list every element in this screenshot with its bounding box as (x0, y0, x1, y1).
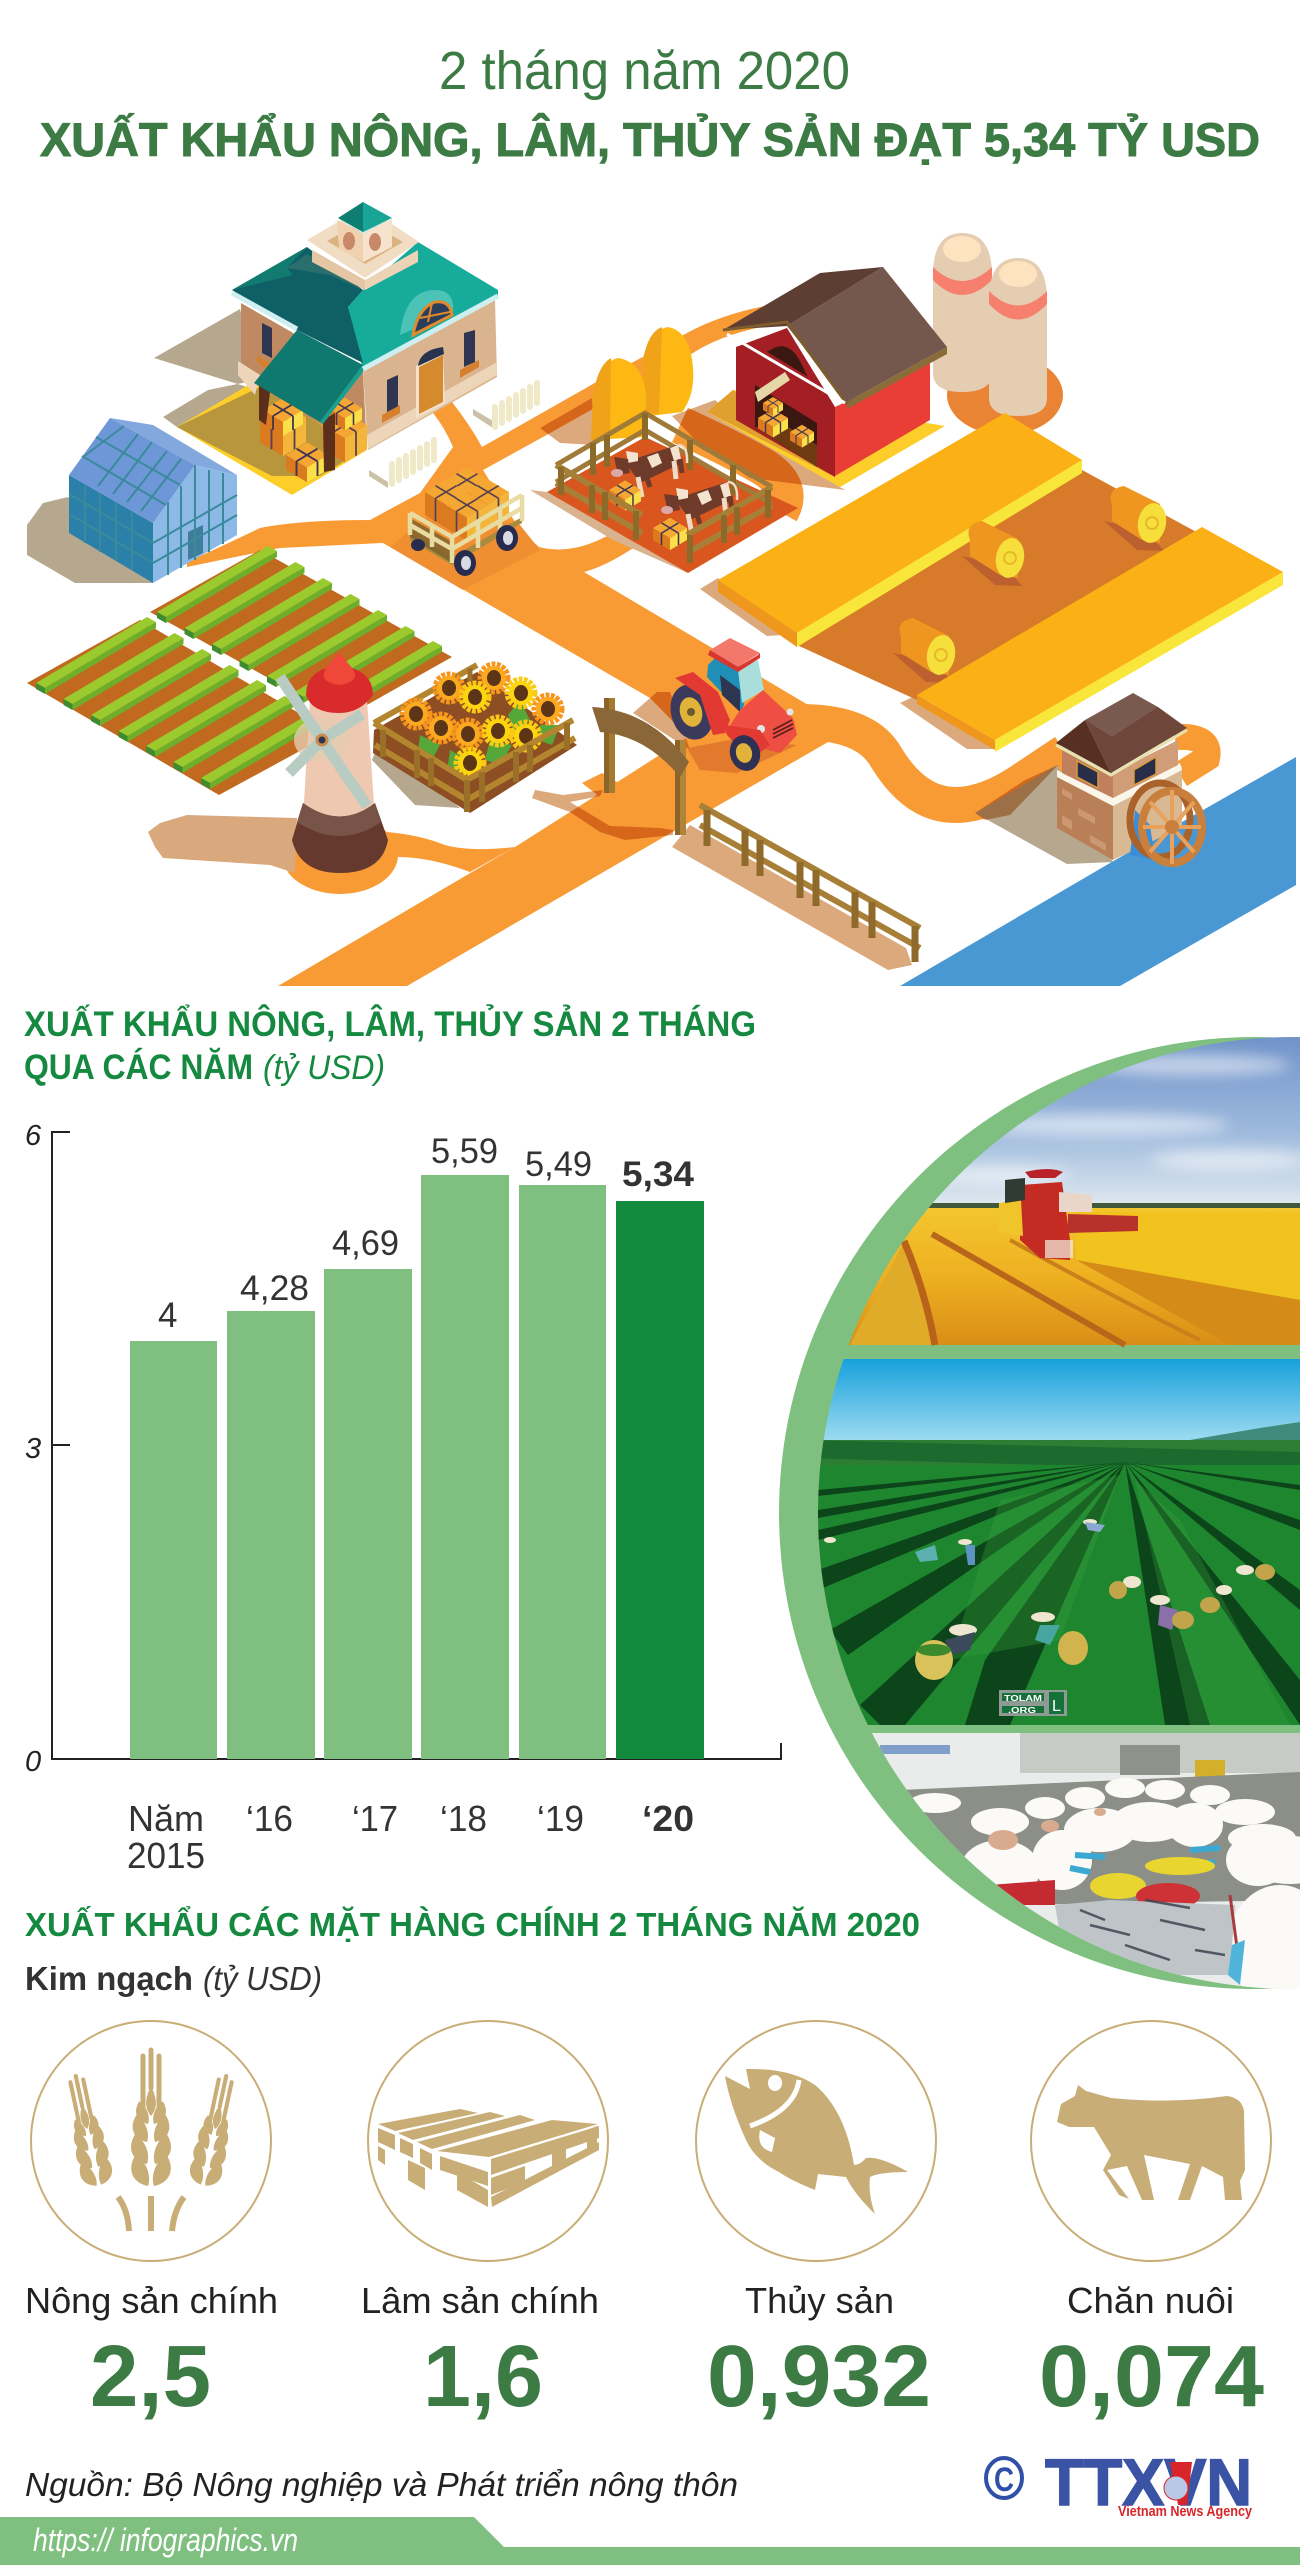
axis labels (25, 1120, 42, 1778)
hay stacks (591, 327, 693, 442)
bars (130, 1175, 704, 1759)
x axis labels: 2015 (127, 1835, 205, 1876)
red barn (707, 267, 947, 487)
title: 2 tháng năm 2020 (439, 41, 850, 101)
bar values (158, 1132, 695, 1335)
photo: seafood factory (872, 1733, 1300, 1989)
title: XUẤT KHẨU NÔNG, LÂM, THỦY SẢN ĐẠT 5,34 TỶ USD (40, 113, 1260, 166)
section heading: main export goods (25, 1906, 920, 1997)
logo on photo: L (1052, 1698, 1061, 1715)
roads (187, 306, 1208, 986)
long wooden fence (700, 805, 920, 962)
axis labels: 6 (25, 1120, 42, 1152)
x axis labels: ‘17 (352, 1798, 398, 1839)
picket fences (369, 383, 537, 488)
section heading: exports over the years: (tỷ USD) (263, 1049, 385, 1087)
bar chart (25, 1120, 781, 1876)
bar values: 5,49 (525, 1145, 592, 1184)
section heading: exports over the years (24, 1004, 756, 1087)
bar values: 5,59 (431, 1132, 498, 1171)
icon: wooden pallet (378, 2109, 599, 2207)
photo: tea plantation (800, 1359, 1300, 1725)
stat: agriculture: Nông sản chính (25, 2280, 278, 2321)
stat: livestock: Chăn nuôi (1067, 2280, 1234, 2321)
main house (177, 202, 498, 495)
bar values: 4 (158, 1296, 177, 1335)
stat: livestock: 0,074 (1039, 2328, 1264, 2425)
section heading: exports over the years: QUA CÁC NĂM (24, 1047, 253, 1087)
stat: forestry: 1,6 (423, 2328, 543, 2425)
TTXVN logo: TTXVN (1045, 2445, 1252, 2519)
section heading: main export goods: (tỷ USD) (203, 1960, 322, 1997)
section heading: exports over the years: XUẤT KHẨU NÔNG, LÂM, THỦY SẢN 2 THÁNG (24, 1004, 756, 1044)
logo on photo: .ORG (1008, 1706, 1036, 1715)
x axis labels: ‘18 (440, 1798, 487, 1839)
crop field (27, 546, 452, 795)
green ring (779, 1037, 1300, 1989)
cast shadows (27, 309, 1113, 970)
footer band (0, 2517, 1300, 2565)
hay fields (718, 413, 1283, 752)
logo on photo (999, 1690, 1067, 1716)
stat: forestry (361, 2021, 608, 2425)
footer band: https:// infographics.vn (33, 2522, 298, 2558)
wooden gate (592, 698, 689, 835)
x axis labels: ‘19 (537, 1798, 584, 1839)
icon: wheat (57, 2050, 245, 2231)
x axis labels: Năm (128, 1798, 204, 1839)
icon: fish (725, 2069, 908, 2214)
logo on photo: TOLAM (1004, 1694, 1042, 1703)
silos (933, 233, 1047, 416)
x axis labels: ‘20 (642, 1798, 694, 1839)
stat: livestock (1031, 2021, 1271, 2425)
photo: rice harvest (848, 1037, 1300, 1348)
stat: fishery (696, 2021, 936, 2425)
bar values: 4,69 (332, 1224, 399, 1263)
stat: fishery: 0,932 (707, 2328, 931, 2425)
bar values: 5,34 (622, 1155, 695, 1194)
axes (52, 1132, 781, 1759)
water mill (1056, 693, 1202, 864)
x axis labels: ‘16 (246, 1798, 293, 1839)
hay wagon (390, 467, 540, 590)
cattle pen (530, 413, 798, 573)
source: Nguồn: Bộ Nông nghiệp và Phát triển nông thôn (25, 2466, 738, 2503)
x axis labels (127, 1798, 694, 1876)
axis labels: 3 (25, 1433, 41, 1465)
icon: cow (1057, 2085, 1245, 2200)
stat: fishery: Thủy sản (745, 2280, 894, 2321)
TTXVN logo: C (994, 2461, 1014, 2499)
sunflower pen (373, 665, 577, 813)
stat: forestry: Lâm sản chính (361, 2280, 599, 2321)
river (900, 757, 1296, 986)
greenhouse (69, 418, 237, 583)
TTXVN logo: Vietnam News Agency (1118, 2503, 1253, 2520)
bar values: 4,28 (240, 1269, 309, 1308)
windmill (280, 653, 388, 873)
stat: agriculture: 2,5 (90, 2328, 211, 2425)
farm illustration (27, 202, 1296, 986)
photo collage circle (779, 1030, 1300, 2005)
section heading: main export goods: Kim ngạch (25, 1960, 193, 1997)
title (40, 41, 1260, 166)
section heading: main export goods: XUẤT KHẨU CÁC MẶT HÀNG CHÍNH 2 THÁNG NĂM 2020 (25, 1906, 920, 1943)
axis labels: 0 (25, 1746, 41, 1778)
stat: agriculture (25, 2021, 278, 2425)
tractor (664, 638, 797, 774)
